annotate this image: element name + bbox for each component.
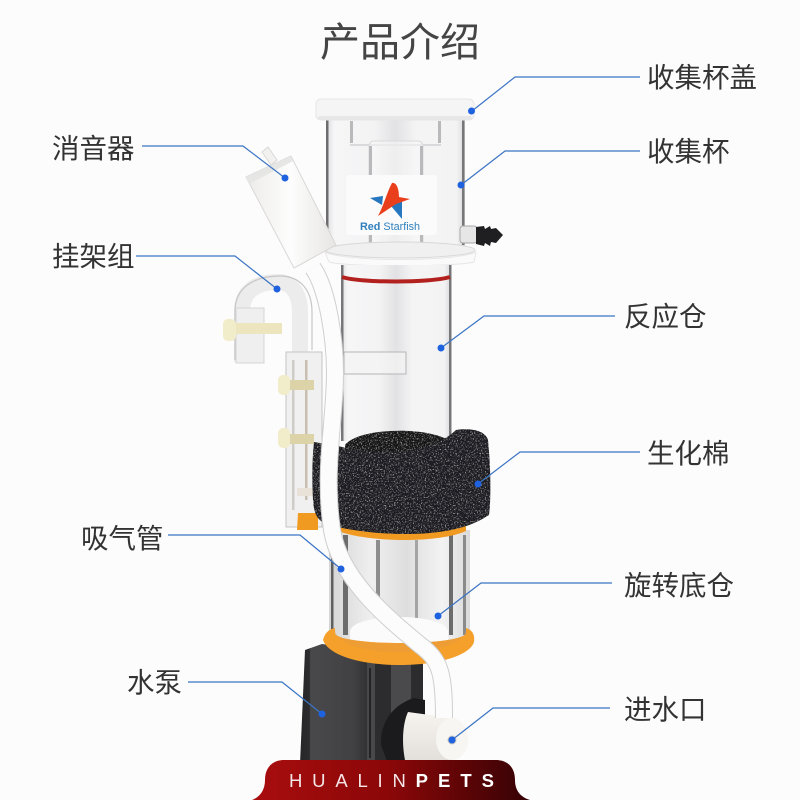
pump collar [381, 698, 425, 764]
lower swivel chamber [329, 530, 470, 642]
callout: 消音器 [52, 133, 288, 182]
callout: 生化棉 [474, 438, 730, 488]
callout: 挂架组 [52, 241, 280, 292]
title: 产品介绍 [320, 21, 480, 65]
callout: 水泵 [127, 667, 326, 718]
callout: 消音器: 消音器 [52, 133, 134, 164]
water pump [300, 644, 425, 764]
callout: 进水口 [448, 694, 706, 744]
callout: 收集杯盖: 收集杯盖 [647, 62, 757, 93]
product: protein skimmer [223, 99, 503, 764]
orange bracket foot [297, 513, 318, 530]
callout: 旋转底仓: 旋转底仓 [624, 570, 734, 601]
callout: 反应仓 [438, 301, 706, 352]
callout: 挂架组: 挂架组 [52, 241, 134, 272]
outlet nozzle [460, 226, 503, 246]
logo label [346, 175, 437, 235]
reaction chamber [341, 265, 452, 441]
callout: 收集杯: 收集杯 [647, 136, 730, 167]
callout: 吸气管 [81, 523, 344, 572]
collection cup lid [316, 99, 474, 120]
callout: 旋转底仓 [434, 570, 734, 620]
upper collection cup [326, 118, 465, 250]
brand banner [252, 760, 530, 800]
orange base ring [323, 628, 474, 665]
orange ring under foam [338, 526, 466, 540]
biological foam sleeve [312, 429, 490, 534]
brand name: HUALINPETS [289, 770, 504, 791]
air tube [313, 268, 444, 718]
callout: 进水口: 进水口 [624, 694, 706, 725]
logo wordmark: Red Starfish [360, 221, 420, 233]
middle plate [325, 242, 476, 266]
hanger screws [223, 319, 314, 448]
callout: 收集杯盖 [468, 62, 757, 114]
callout: 收集杯 [458, 136, 730, 188]
callout: 生化棉: 生化棉 [647, 438, 730, 469]
silencer [246, 147, 336, 268]
callout: 反应仓: 反应仓 [624, 301, 706, 332]
water inlet [403, 712, 468, 760]
logo: red starfish [370, 183, 410, 219]
callout: 水泵: 水泵 [127, 667, 182, 698]
hanger bracket [223, 276, 322, 530]
callout: 吸气管: 吸气管 [81, 523, 164, 554]
